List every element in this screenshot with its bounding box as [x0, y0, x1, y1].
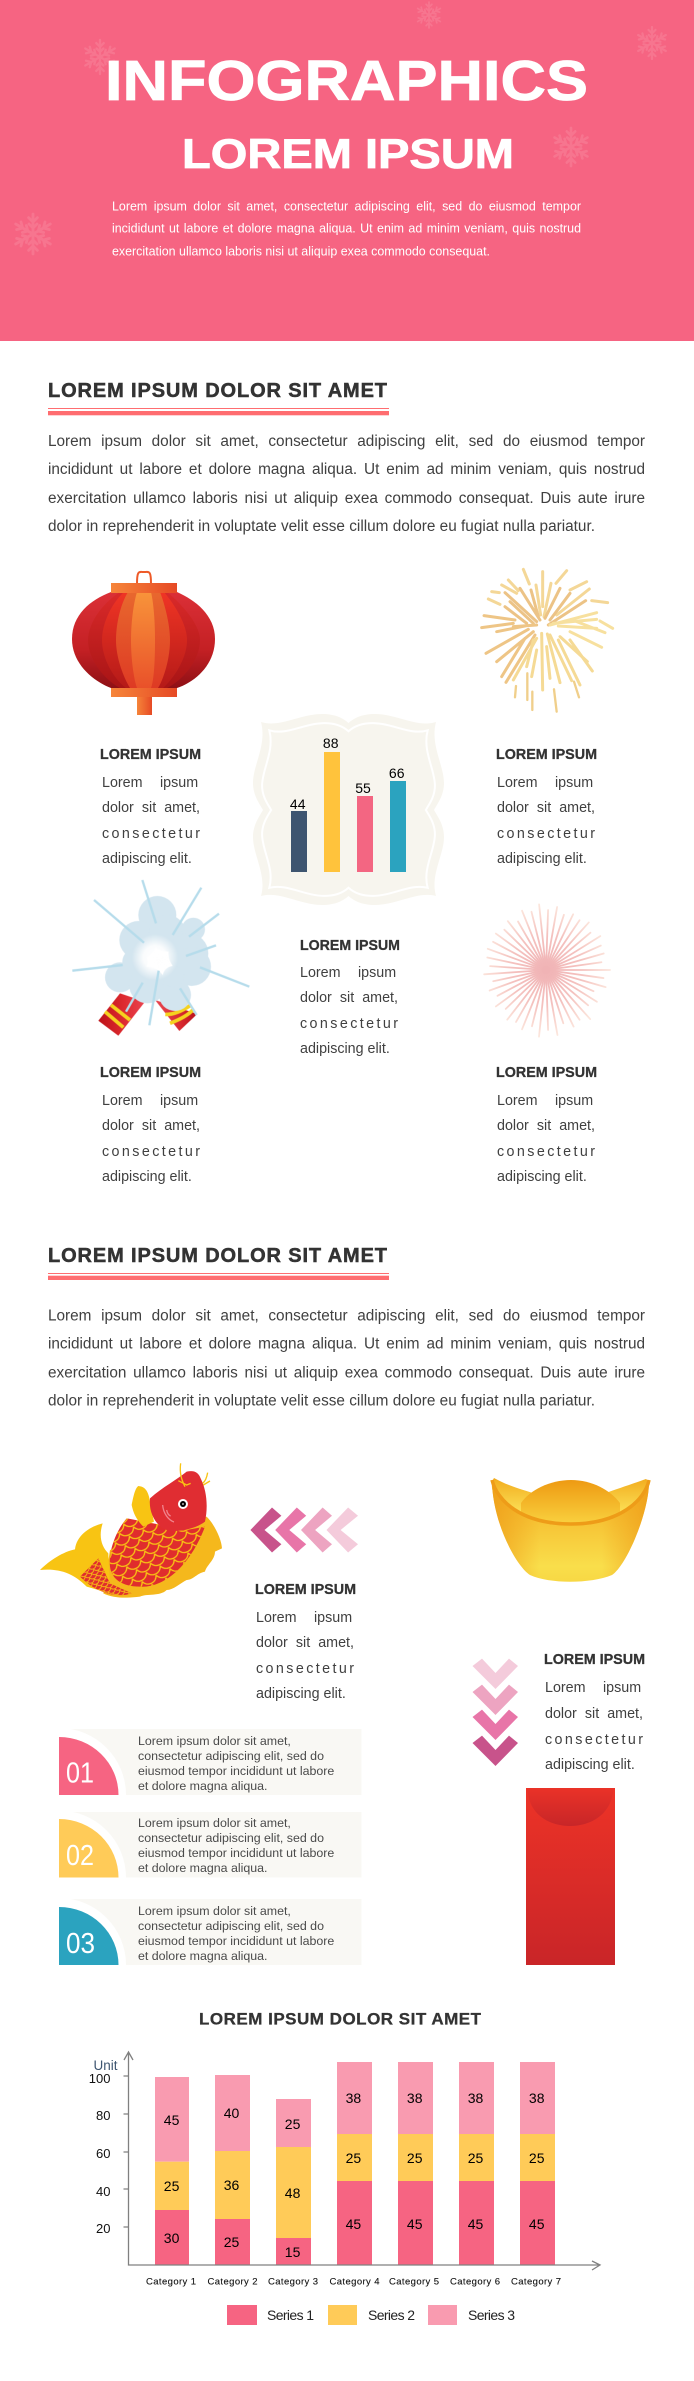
- text block: firework: LOREM IPSUM: [496, 746, 597, 763]
- text block: lantern: dolor sit amet,: [102, 800, 200, 816]
- section 1 paragraph: Lorem ipsum dolor sit amet, consectetur adipiscing elit, sed do eiusmod tempor: [48, 433, 645, 450]
- data labels: 38: [407, 2090, 423, 2106]
- category labels: Category 7: [511, 2276, 561, 2288]
- text block: lantern: Lorem: [102, 775, 143, 791]
- data labels: 25: [224, 2234, 239, 2250]
- text block: firecrackers: adipiscing elit.: [102, 1169, 192, 1185]
- title: INFOGRAPHICS: [105, 49, 588, 113]
- item text: et dolore magna aliqua.: [138, 1949, 268, 1963]
- panel: item 02: 02: [66, 1840, 94, 1872]
- text block: firecrackers: [100, 1064, 201, 1185]
- header banner: [0, 0, 694, 341]
- icon: koi fish: [40, 1463, 222, 1598]
- section 2 paragraph: dolor in reprehenderit in voluptate velit esse cillum dolore eu fugiat nulla pariatur.: [48, 1392, 595, 1409]
- text block: lantern: adipiscing elit.: [102, 851, 192, 867]
- stacked bar chart: [89, 2052, 600, 2288]
- data labels: 36: [224, 2177, 239, 2193]
- text block: ingot: adipiscing elit.: [545, 1757, 635, 1773]
- text block: chevrons: ipsum: [314, 1610, 352, 1626]
- section 2 heading: LOREM IPSUM DOLOR SIT AMET: [48, 1245, 387, 1267]
- text block: firecrackers: dolor sit amet,: [102, 1118, 200, 1134]
- text block: ingot: consectetur: [545, 1732, 643, 1748]
- item text: [138, 1904, 334, 1963]
- data labels: 25: [346, 2150, 361, 2166]
- bars: [291, 752, 406, 872]
- category labels: Category 3: [268, 2276, 318, 2288]
- text block: ingot: Lorem: [545, 1680, 586, 1696]
- text block: chevrons: LOREM IPSUM: [255, 1581, 356, 1598]
- category labels: Category 4: [330, 2276, 380, 2288]
- y axis labels: Unit: [94, 2058, 118, 2073]
- item text: Lorem ipsum dolor sit amet,: [138, 1904, 291, 1918]
- header paragraph: incididunt ut labore et dolore magna aliqua. Ut enim ad minim veniam, quis nostrud: [112, 222, 581, 236]
- text block: center: LOREM IPSUM: [300, 937, 400, 954]
- chart title: LOREM IPSUM DOLOR SIT AMET: [199, 2010, 482, 2028]
- icon: firecrackers: [72, 880, 249, 1036]
- icon: left chevrons: [250, 1508, 358, 1552]
- text block: ingot: ipsum: [603, 1680, 641, 1696]
- item text: consectetur adipiscing elit, sed do: [138, 1749, 324, 1763]
- category labels: Category 1: [146, 2276, 196, 2288]
- data labels: 25: [468, 2150, 483, 2166]
- item text: eiusmod tempor incididunt ut labore: [138, 1846, 334, 1860]
- bars: series stacks: [155, 2062, 555, 2265]
- text block: center: [300, 937, 400, 1057]
- data labels: 45: [346, 2216, 361, 2232]
- text block: chevrons: Lorem: [256, 1610, 297, 1626]
- y axis labels: 20: [96, 2221, 110, 2236]
- text block: ingot: dolor sit amet,: [545, 1706, 643, 1722]
- header paragraph: Lorem ipsum dolor sit amet, consectetur adipiscing elit, sed do eiusmod tempor: [112, 200, 581, 214]
- text block: lantern: consectetur: [102, 826, 200, 842]
- data labels: 30: [164, 2230, 180, 2246]
- item text: [138, 1816, 334, 1875]
- bar values: 55: [355, 780, 371, 796]
- section 2 paragraph: incididunt ut labore et dolore magna aliqua. Ut enim ad minim veniam, quis nostrud: [48, 1336, 645, 1353]
- text block: ingot: LOREM IPSUM: [544, 1651, 645, 1668]
- item text: [138, 1734, 334, 1793]
- text block: pink burst: [496, 1064, 597, 1185]
- text block: pink burst: LOREM IPSUM: [496, 1064, 597, 1081]
- text block: lantern: ipsum: [160, 775, 198, 791]
- text block: firework: [496, 746, 597, 867]
- text block: pink burst: adipiscing elit.: [497, 1169, 587, 1185]
- icon: gold firework: [482, 569, 613, 712]
- y axis labels: 100: [89, 2071, 110, 2086]
- text block: firecrackers: Lorem: [102, 1093, 143, 1109]
- text block: ingot: [544, 1651, 645, 1773]
- data labels: 25: [164, 2178, 180, 2194]
- item text: eiusmod tempor incididunt ut labore: [138, 1934, 334, 1948]
- text block: center: Lorem: [300, 965, 341, 981]
- y axis labels: 80: [96, 2108, 110, 2123]
- text block: firecrackers: consectetur: [102, 1144, 200, 1160]
- data labels: 25: [407, 2150, 423, 2166]
- text block: chevrons: consectetur: [256, 1661, 354, 1677]
- icon: red envelope: [526, 1788, 615, 1965]
- data labels: 38: [468, 2090, 483, 2106]
- text block: center: consectetur: [300, 1016, 398, 1032]
- legend: Series 2: [368, 2307, 415, 2323]
- bar values: 88: [323, 735, 339, 751]
- header paragraph: exercitation ullamco laboris nisi ut aliquip exea commodo consequat.: [112, 244, 490, 258]
- text block: center: adipiscing elit.: [300, 1041, 390, 1057]
- item text: eiusmod tempor incididunt ut labore: [138, 1764, 334, 1778]
- category labels: [146, 2276, 561, 2288]
- bar values: 44: [290, 796, 306, 812]
- data labels: 25: [529, 2150, 545, 2166]
- category labels: Category 6: [450, 2276, 500, 2288]
- text block: chevrons: dolor sit amet,: [256, 1635, 354, 1651]
- data labels: 45: [164, 2112, 180, 2128]
- text block: firework: Lorem: [497, 775, 538, 791]
- text block: lantern: [100, 746, 201, 867]
- text block: chevrons: adipiscing elit.: [256, 1686, 346, 1702]
- section 2 heading: [48, 1245, 389, 1280]
- legend: Series 3: [468, 2307, 515, 2323]
- legend: Series 1: [267, 2307, 314, 2323]
- section 1 paragraph: incididunt ut labore et dolore magna aliqua. Ut enim ad minim veniam, quis nostrud: [48, 461, 645, 478]
- axes: [124, 2052, 600, 2270]
- section 1 heading: LOREM IPSUM DOLOR SIT AMET: [48, 380, 387, 402]
- header paragraph: [112, 200, 581, 258]
- subtitle: LOREM IPSUM: [182, 130, 514, 177]
- bar values: 66: [389, 765, 405, 781]
- data labels: 45: [407, 2216, 423, 2232]
- data labels: 38: [346, 2090, 361, 2106]
- text block: pink burst: ipsum: [555, 1093, 593, 1109]
- data labels: 15: [285, 2244, 301, 2260]
- data labels: 45: [529, 2216, 545, 2232]
- panel: item 03: 03: [66, 1928, 95, 1960]
- data labels: 48: [285, 2185, 301, 2201]
- item text: Lorem ipsum dolor sit amet,: [138, 1734, 291, 1748]
- icon: snowflakes: [13, 2, 668, 254]
- item text: Lorem ipsum dolor sit amet,: [138, 1816, 291, 1830]
- panel: item 03: [59, 1898, 362, 1965]
- section 1 paragraph: exercitation ullamco laboris nisi ut aliquip exea commodo consequat. Duis aute irure: [48, 490, 645, 507]
- icon: red lantern: [72, 572, 215, 715]
- item text: et dolore magna aliqua.: [138, 1861, 268, 1875]
- section 2 paragraph: exercitation ullamco laboris nisi ut aliquip exea commodo consequat. Duis aute irure: [48, 1364, 645, 1381]
- category labels: Category 2: [208, 2276, 258, 2288]
- category labels: Category 5: [389, 2276, 439, 2288]
- data labels: 40: [224, 2105, 239, 2121]
- text block: firework: dolor sit amet,: [497, 800, 595, 816]
- text block: pink burst: consectetur: [497, 1144, 595, 1160]
- section 1 paragraph: dolor in reprehenderit in voluptate velit esse cillum dolore eu fugiat nulla pariatur.: [48, 518, 595, 535]
- data labels: 38: [529, 2090, 545, 2106]
- section 1 heading: [48, 380, 389, 415]
- section 1 paragraph: [48, 433, 645, 535]
- legend: [227, 2305, 515, 2325]
- text block: firecrackers: ipsum: [160, 1093, 198, 1109]
- text block: center: dolor sit amet,: [300, 990, 398, 1006]
- text block: firework: consectetur: [497, 826, 595, 842]
- item text: et dolore magna aliqua.: [138, 1779, 268, 1793]
- text block: chevrons: [255, 1581, 356, 1702]
- data labels: [164, 2090, 545, 2260]
- panel: item 01: [59, 1728, 362, 1795]
- y axis labels: 60: [96, 2146, 110, 2161]
- section 2 paragraph: Lorem ipsum dolor sit amet, consectetur adipiscing elit, sed do eiusmod tempor: [48, 1308, 645, 1325]
- item text: consectetur adipiscing elit, sed do: [138, 1831, 324, 1845]
- text block: lantern: LOREM IPSUM: [100, 746, 201, 763]
- text block: firework: adipiscing elit.: [497, 851, 587, 867]
- data labels: 25: [285, 2116, 301, 2132]
- text block: pink burst: Lorem: [497, 1093, 538, 1109]
- icon: gold ingot: [492, 1478, 649, 1582]
- panel: framed bar chart: [253, 714, 444, 905]
- item text: consectetur adipiscing elit, sed do: [138, 1919, 324, 1933]
- bar values: [290, 735, 405, 812]
- text block: firework: ipsum: [555, 775, 593, 791]
- y axis labels: 40: [96, 2184, 110, 2199]
- panel: item 02: [59, 1810, 362, 1878]
- text block: center: ipsum: [358, 965, 396, 981]
- icon: down chevrons: [472, 1659, 518, 1766]
- text block: pink burst: dolor sit amet,: [497, 1118, 595, 1134]
- y axis labels: [89, 2058, 118, 2236]
- icon: pink burst: [484, 904, 610, 1037]
- section 2 paragraph: [48, 1308, 645, 1409]
- data labels: 45: [468, 2216, 483, 2232]
- panel: item 01: 01: [66, 1758, 94, 1790]
- text block: firecrackers: LOREM IPSUM: [100, 1064, 201, 1081]
